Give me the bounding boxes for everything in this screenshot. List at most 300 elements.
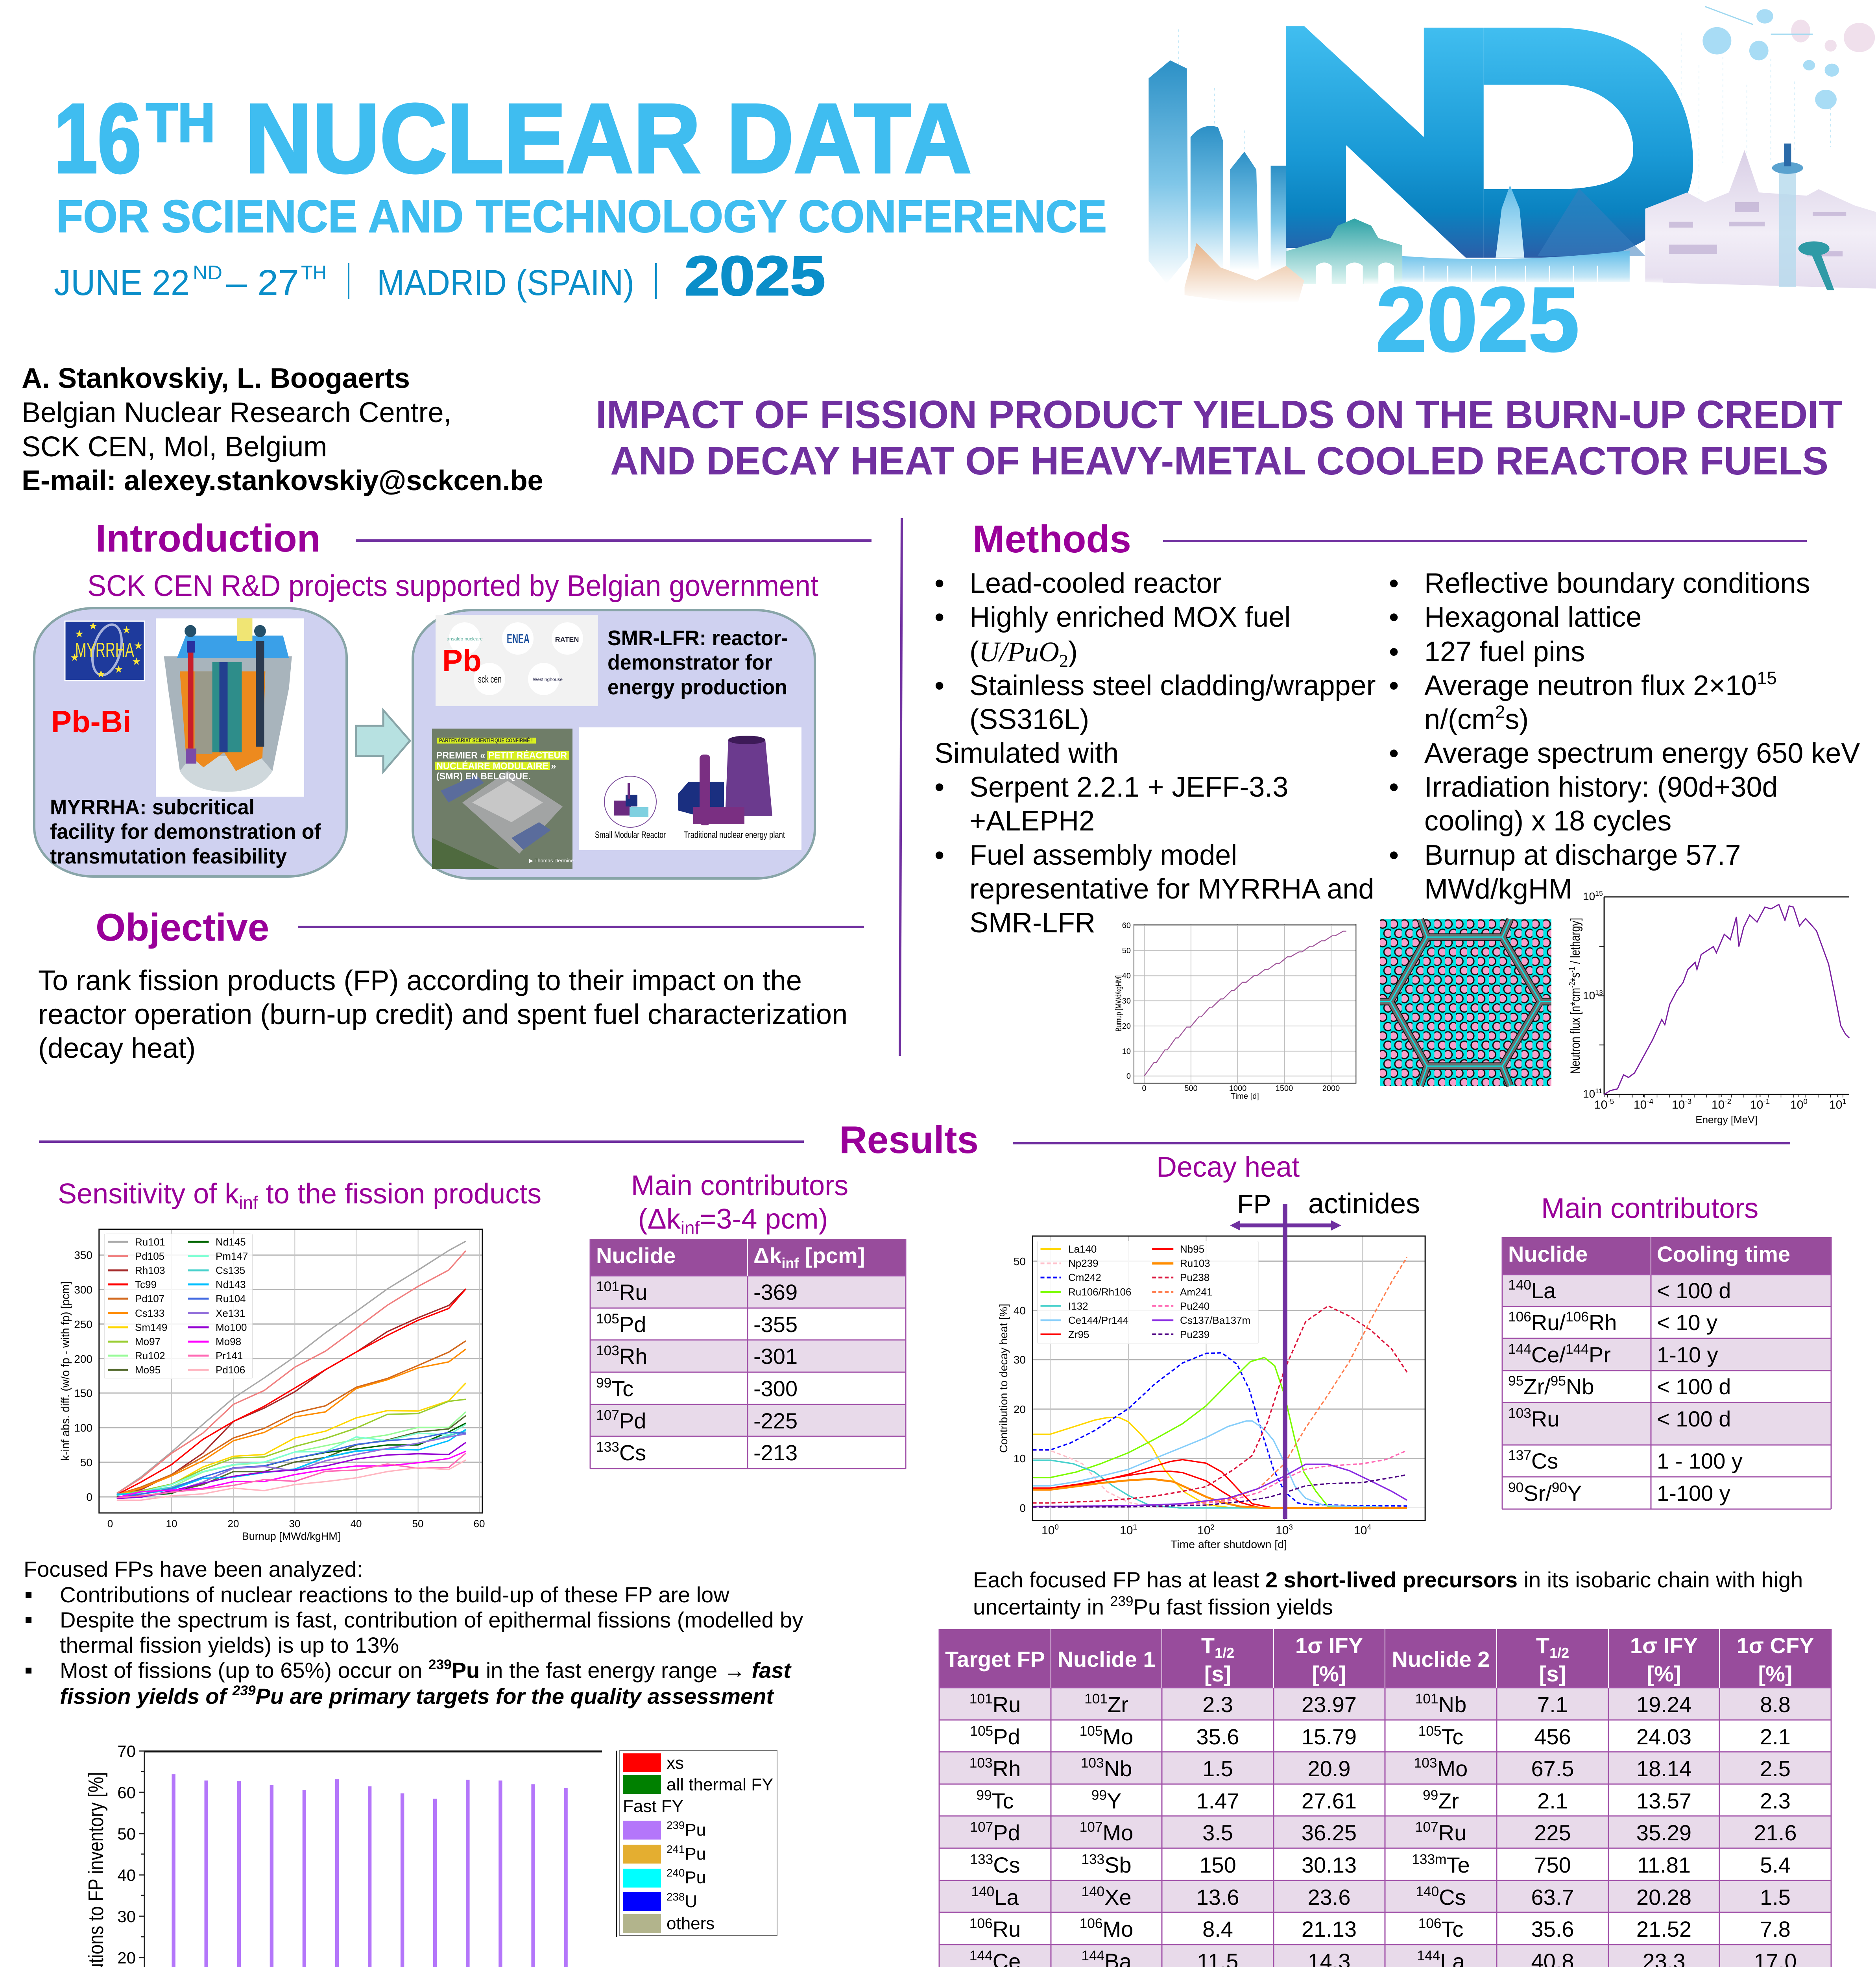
MYRRHA caption: transmutation feasibility [50,845,287,868]
methods list: left column: Serpent 2.2.1 + JEFF-3.3 [969,771,1288,803]
icon: MYRRHA logo: ★ [134,640,143,651]
table: main contributors to k-inf: 107Pd [596,1408,646,1433]
annotation: FP vs actinides [1230,1188,1420,1231]
table: precursors and uncertainties: 1.5 [1202,1756,1233,1781]
methods list: left column: Lead-cooled reactor [969,568,1221,599]
methods list: left column: Stainless steel cladding/wrapper [969,670,1376,701]
table: precursors and uncertainties: 24.03 [1636,1724,1691,1749]
table: precursors and uncertainties: 106Ru [969,1916,1021,1941]
text: precursors note [973,1567,1803,1619]
image: SMR versus traditional plant: Small Modular Reactor [595,830,666,840]
chart: burnup vs time: 20 [1122,1022,1131,1031]
table: precursors and uncertainties: 63.7 [1531,1885,1574,1910]
text: focused FPs analysis [24,1557,803,1709]
table: main contributors to k-inf: [pcm] [799,1243,865,1268]
table: precursors and uncertainties: 99Y [1091,1788,1121,1813]
SMR-LFR caption: SMR-LFR: reactor- [607,626,788,650]
methods list: right column: cooling) x 18 cycles [1424,805,1671,837]
methods list: left column: SMR-LFR [969,907,1095,939]
conference title [54,83,1107,242]
objective text: (decay heat) [38,1033,196,1064]
conference title: NUCLEAR DATA [245,83,971,193]
chart: sensitivity of k-inf: Mo97 [135,1336,161,1347]
heading: Introduction: Introduction [96,517,321,560]
table: precursors and uncertainties: 1.47 [1196,1788,1239,1813]
image: SMR site poster: PARTENARIAT SCIENTIFIQUE CONFIRMÉ ! [439,737,533,744]
chart: decay heat contributions: Pu239 [1180,1329,1209,1340]
table: precursors and uncertainties: 23.97 [1302,1692,1357,1717]
table: precursors and uncertainties: 20.28 [1636,1885,1691,1910]
chart: decay heat contributions: Zr95 [1068,1329,1089,1340]
table: precursors and uncertainties: 2.3 [1202,1692,1233,1717]
table: precursors and uncertainties: Nuclide 2 [1392,1647,1490,1672]
chart: decay heat contributions: Ce144/Pr144 [1068,1314,1128,1326]
methods list: left column: representative for MYRRHA and [969,873,1374,905]
table: precursors and uncertainties: 106Tc [1418,1916,1463,1941]
chart: burnup vs time: 0 [1142,1084,1147,1093]
chart: decay heat contributions: Time after shutdown [d] [1171,1538,1287,1550]
annotation: FP vs actinides: FP [1237,1189,1271,1219]
table: precursors and uncertainties: [s] [1539,1661,1566,1686]
chart: sensitivity of k-inf: Sm149 [135,1321,167,1333]
heading: Methods: Methods [973,517,1131,561]
MYRRHA caption [50,795,321,868]
MYRRHA caption: MYRRHA: subcritical [50,795,255,819]
methods list: left column: • [934,771,944,803]
chart: sensitivity of k-inf: Ru101 [135,1236,165,1248]
conference title: 16 [54,83,141,193]
chart: decay heat contributions: 102 [1197,1523,1215,1537]
chart: neutron flux spectrum: 1013 [1583,989,1603,1002]
partner logos: ansaldo nucleare [447,636,483,642]
partner logos: ENEA [507,631,530,646]
icon: MYRRHA logo: ★ [114,663,123,675]
conference dates and place: JUNE 22 [54,263,190,303]
chart: neutron flux spectrum: 10-2 [1712,1098,1731,1111]
chart: decay heat contributions: Ru106/Rh106 [1068,1286,1131,1298]
chart: sensitivity of k-inf: 50 [80,1456,92,1469]
table: precursors and uncertainties: 35.6 [1196,1724,1239,1749]
methods list: right column: Average neutron flux 2×1015 [1424,668,1777,701]
methods list: left column: • [934,840,944,871]
chart: neutron flux spectrum: Neutron flux [n*cm-2*s-1 / lethargy] [1567,918,1583,1074]
table: precursors and uncertainties: 99Zr [1423,1788,1459,1813]
chart: decay heat contributions: 104 [1354,1523,1371,1537]
methods list: right column: Hexagonal lattice [1424,602,1642,633]
chart: sensitivity of k-inf: Cs133 [135,1307,164,1319]
table: main contributors to decay heat: 1-10 y [1657,1342,1718,1367]
legend: fission contributions: 241Pu [667,1843,706,1864]
chart: sensitivity of k-inf: 150 [74,1387,92,1399]
image: SMR site poster: ▶ Thomas Dermine [529,858,574,864]
authors and affiliation: Belgian Nuclear Research Centre, [22,397,452,428]
table: precursors and uncertainties: 225 [1534,1820,1571,1845]
text: focused FPs analysis: Focused FPs have been analyzed: [24,1557,363,1581]
chart: decay heat contributions: Np239 [1068,1257,1099,1269]
table: main contributors to decay heat: < 100 d [1657,1406,1731,1431]
chart: burnup vs time: 10 [1122,1047,1131,1056]
text: focused FPs analysis: thermal fission yields) is up to 13% [60,1633,399,1657]
bar chart: contributions to FP inventory: 70 [117,1742,136,1760]
image: hexagonal fuel assembly [1380,919,1551,1086]
table: precursors and uncertainties: 101Nb [1415,1691,1466,1717]
table: precursors and uncertainties [939,1629,1831,1967]
methods list: right column: Irradiation history: (90d+30d [1424,771,1778,803]
image: MYRRHA reactor cut-away [156,618,304,797]
chart: sensitivity of k-inf: 10 [166,1518,177,1530]
table: precursors and uncertainties: 21.52 [1636,1917,1691,1941]
subheading: R&D projects: SCK CEN R&D projects supported by Belgian government [87,569,818,603]
chart: neutron flux spectrum: 10-4 [1634,1098,1653,1111]
chart: sensitivity of k-inf: 300 [74,1284,92,1296]
table: main contributors to decay heat: 137Cs [1508,1448,1558,1473]
image: SMR site poster: PETIT RÉACTEUR [488,750,567,761]
chart: burnup vs time: 0 [1126,1072,1131,1081]
table: main contributors to decay heat: 140La [1508,1277,1556,1303]
table: precursors and uncertainties: 1σ IFY [1295,1633,1363,1658]
bar chart: contributions to FP inventory: 40 [117,1866,136,1884]
table: main contributors to decay heat: < 10 y [1657,1310,1717,1335]
table: precursors and uncertainties: 133Sb [1081,1852,1132,1877]
bar chart: contributions to FP inventory: 50 [117,1825,136,1843]
table: precursors and uncertainties: 140La [971,1884,1019,1910]
poster title [596,393,1843,483]
chart: sensitivity of k-inf: k-inf abs. diff. (w/o fp - with fp) [pcm] [59,1281,72,1461]
bar chart: contributions to FP inventory [82,1742,777,1967]
table: precursors and uncertainties: 18.14 [1636,1756,1691,1781]
chart: burnup vs time [1114,921,1356,1101]
heading: Objective: Objective [96,906,269,949]
legend: fission contributions: 239Pu [667,1819,706,1840]
annotation: FP vs actinides: actinides [1308,1188,1420,1220]
chart: sensitivity of k-inf: Pd105 [135,1250,164,1262]
table: precursors and uncertainties: 107Mo [1080,1819,1133,1845]
legend: fission contributions [617,1751,777,1937]
table: precursors and uncertainties: 1σ IFY [1630,1633,1698,1658]
table: precursors and uncertainties: 101Zr [1084,1691,1128,1717]
table: precursors and uncertainties: 21.13 [1302,1917,1357,1941]
chart: sensitivity of k-inf: Mo100 [216,1321,247,1333]
table: main contributors to k-inf: 101Ru [596,1279,647,1305]
table: precursors and uncertainties: Nuclide 1 [1058,1647,1155,1672]
chart: decay heat contributions: 101 [1120,1523,1137,1537]
methods list: left column: +ALEPH2 [969,805,1095,837]
icon: MYRRHA logo: ★ [122,624,131,636]
chart: decay heat contributions: Contribution to decay heat [%] [997,1304,1010,1453]
table heading: main contributors k-inf: inf [681,1218,700,1238]
table: precursors and uncertainties: 103Mo [1414,1755,1468,1781]
methods list: left column: Simulated with [934,738,1119,769]
chart: sensitivity of k-inf: 30 [289,1518,300,1530]
legend: fission contributions: Fast FY [623,1797,683,1816]
table: precursors and uncertainties: Target FP [945,1647,1045,1672]
table: precursors and uncertainties: 107Pd [970,1819,1020,1845]
chart: decay heat contributions: Nb95 [1180,1243,1204,1255]
chart: decay heat contributions: 0 [1019,1502,1026,1514]
chart: decay heat contributions: Pu240 [1180,1300,1209,1312]
table: precursors and uncertainties: 8.4 [1202,1917,1233,1941]
chart: neutron flux spectrum: 100 [1790,1098,1808,1111]
chart: decay heat contributions: Cm242 [1068,1271,1101,1283]
table: main contributors to decay heat: Nuclide [1508,1242,1588,1266]
table: precursors and uncertainties: 140Xe [1081,1884,1132,1910]
methods list: right column: Average spectrum energy 650 keV [1424,738,1860,769]
icon: MYRRHA logo: ★ [75,628,84,640]
chart: decay heat contributions: La140 [1068,1243,1097,1255]
methods list: right column: 127 fuel pins [1424,636,1585,668]
image: SMR site poster [432,729,574,869]
icon: MYRRHA logo: ★ [89,620,98,632]
table: precursors and uncertainties: 23.6 [1308,1885,1350,1910]
chart: sensitivity of k-inf: 200 [74,1353,92,1365]
chart: sensitivity of k-inf: 0 [107,1518,113,1530]
table: precursors and uncertainties: 106Mo [1080,1916,1133,1941]
heading: Results: Results [839,1118,979,1161]
chart: burnup vs time: 500 [1184,1084,1198,1093]
chart: sensitivity of k-inf: 0 [86,1491,92,1503]
chart: sensitivity of k-inf: 350 [74,1249,92,1261]
poster title: IMPACT OF FISSION PRODUCT YIELDS ON THE BURN-UP CREDIT [596,393,1843,437]
table heading: main contributors k-inf: =3-4 pcm) [700,1203,828,1235]
partner logos: Westinghouse [533,677,563,682]
chart: neutron flux spectrum [1567,889,1849,1126]
chart: burnup vs time: 1000 [1229,1084,1246,1093]
bar chart: contributions to FP inventory: 20 [117,1949,136,1967]
objective text [38,965,848,1064]
chart heading: sensitivity: to the fission products [258,1178,541,1210]
table: main contributors to k-inf: -301 [753,1344,798,1369]
SMR-LFR caption: demonstrator for [607,651,772,674]
table: main contributors to k-inf: -225 [753,1408,798,1433]
conference dates and place: ND [193,262,222,284]
table: precursors and uncertainties: 36.25 [1302,1820,1357,1845]
methods list: left column: • [934,670,944,701]
methods list: right column: • [1389,670,1399,701]
chart: sensitivity of k-inf: Ru104 [216,1293,246,1305]
table: precursors and uncertainties: 7.8 [1760,1917,1791,1941]
table: precursors and uncertainties: 101Ru [969,1691,1021,1717]
table heading: main contributors k-inf [631,1170,848,1238]
table heading: main contributors k-inf: Main contributors [631,1170,848,1201]
chart: sensitivity of k-inf: Pd106 [216,1364,245,1376]
chart: neutron flux spectrum: 1015 [1583,889,1603,902]
table: main contributors to k-inf: 105Pd [596,1311,646,1337]
methods list: right column: Reflective boundary conditions [1424,568,1810,599]
table: main contributors to decay heat: 90Sr/90Y [1508,1480,1582,1506]
chart: burnup vs time: 2000 [1322,1084,1340,1093]
methods list: left column [934,568,1376,939]
objective text: reactor operation (burn-up credit) and spent fuel characterization [38,999,848,1030]
image: SMR site poster: » [551,761,556,771]
chart: sensitivity of k-inf: Rh103 [135,1264,165,1276]
table: precursors and uncertainties: 15.79 [1302,1724,1357,1749]
table: precursors and uncertainties: 99Tc [976,1788,1014,1813]
icon: MYRRHA logo: ★ [70,651,79,663]
chart: burnup vs time: Time [d] [1231,1092,1259,1101]
table: precursors and uncertainties: [%] [1758,1661,1793,1686]
table: precursors and uncertainties: 1σ CFY [1736,1633,1814,1658]
chart: decay heat contributions [997,1236,1425,1550]
heading: Objective [96,906,864,949]
authors and affiliation: E-mail: alexey.stankovskiy@sckcen.be [22,465,543,496]
methods list: left column: 2 [1059,651,1068,671]
chart: decay heat contributions: Ru103 [1180,1257,1210,1269]
chart: sensitivity of k-inf: Tc99 [135,1279,157,1290]
table: precursors and uncertainties: 67.5 [1531,1756,1574,1781]
legend: fission contributions: 238U [667,1891,697,1911]
image: SMR site poster: PREMIER « [436,750,485,761]
table: main contributors to k-inf [590,1239,906,1469]
chart: sensitivity of k-inf: 20 [228,1518,239,1530]
table: main contributors to k-inf: -369 [753,1280,798,1305]
table: precursors and uncertainties: 2.5 [1760,1756,1791,1781]
table: precursors and uncertainties: 133Cs [970,1852,1020,1877]
table: main contributors to k-inf: 103Rh [596,1343,647,1369]
icon: MYRRHA logo: ★ [132,655,141,667]
chart: sensitivity of k-inf: Nd143 [216,1279,246,1290]
table: main contributors to k-inf: -355 [753,1312,798,1337]
authors and affiliation: SCK CEN, Mol, Belgium [22,431,327,463]
SMR-LFR caption [607,626,788,699]
chart: decay heat contributions: 100 [1041,1523,1059,1537]
chart: sensitivity of k-inf: Pd107 [135,1293,164,1305]
table: precursors and uncertainties: [%] [1312,1661,1346,1686]
partner logos [436,615,598,706]
chart: sensitivity of k-inf: Xe131 [216,1307,245,1319]
chart: neutron flux spectrum: 10-1 [1750,1098,1770,1111]
table: main contributors to k-inf: Nuclide [596,1243,676,1268]
chart: sensitivity of k-inf: 40 [351,1518,362,1530]
partner logos: RATEN [555,636,579,644]
image: SMR versus traditional plant [579,727,801,850]
table: precursors and uncertainties: T [1201,1633,1215,1658]
heading: Introduction [96,517,872,560]
text: focused FPs analysis: Despite the spectrum is fast, contribution of epithermal fissions (modelled by [60,1607,803,1632]
partner logos: Pb [442,643,482,678]
table: precursors and uncertainties: 103Nb [1081,1755,1132,1781]
poster title: AND DECAY HEAT OF HEAVY-METAL COOLED REACTOR FUELS [610,439,1828,483]
table: precursors and uncertainties: 35.6 [1531,1917,1574,1941]
methods list: right column: n/(cm2s) [1424,702,1529,735]
chart: decay heat contributions: 50 [1014,1255,1026,1268]
chart heading: sensitivity: inf [239,1192,258,1213]
table: precursors and uncertainties: 1.5 [1760,1885,1791,1910]
table: precursors and uncertainties: [%] [1647,1661,1681,1686]
chart: burnup vs time: 50 [1122,947,1131,955]
chart heading: decay heat: Decay heat [1156,1151,1300,1183]
chart: decay heat contributions: I132 [1068,1300,1088,1312]
methods list: left column: Highly enriched MOX fuel [969,602,1291,633]
table: main contributors to k-inf: -213 [753,1440,798,1465]
table: precursors and uncertainties: 105Mo [1080,1723,1133,1749]
chart: sensitivity of k-inf: 250 [74,1318,92,1330]
bar chart: contributions to FP inventory: 60 [117,1783,136,1802]
table: precursors and uncertainties: 19.24 [1636,1692,1691,1717]
legend: fission contributions: all thermal FY [667,1775,773,1794]
objective text: To rank fission products (FP) according to their impact on the [38,965,802,996]
panel: SMR-LFR [413,610,815,878]
chart: decay heat contributions: 40 [1014,1305,1026,1317]
chart: neutron flux spectrum: 1011 [1583,1087,1602,1100]
conference dates and place [54,245,825,307]
chart: sensitivity of k-inf: Mo95 [135,1364,161,1376]
table: precursors and uncertainties: 5.4 [1760,1853,1791,1877]
chart: sensitivity of k-inf: Pr141 [216,1350,243,1362]
chart: sensitivity of k-inf: Cs135 [216,1264,245,1276]
table: precursors and uncertainties: 105Pd [970,1723,1020,1749]
methods list: left column: Fuel assembly model [969,840,1237,871]
table: precursors and uncertainties: 2.1 [1760,1724,1791,1749]
chart: decay heat contributions: 20 [1014,1403,1026,1415]
MYRRHA caption: facility for demonstration of [50,820,321,843]
conference title: FOR SCIENCE AND TECHNOLOGY CONFERENCE [56,191,1107,242]
methods list: right column: • [1389,771,1399,803]
methods list: right column: • [1389,602,1399,633]
table: precursors and uncertainties: 103Rh [969,1755,1021,1781]
ND 2025 logo artwork [1148,7,1876,371]
legend: fission contributions: xs [667,1753,684,1773]
methods list: left column: (SS316L) [969,704,1089,735]
methods list: right column: MWd/kgHM [1424,873,1572,905]
methods list: right column: Burnup at discharge 57.7 [1424,840,1741,871]
text: precursors note: Each focused FP has at least 2 short-lived precursors in its isobaric chain with high [973,1567,1803,1592]
table: main contributors to decay heat: 144Ce/144Pr [1508,1341,1611,1367]
chart: neutron flux spectrum: 10-3 [1672,1098,1691,1111]
table: precursors and uncertainties: 20.9 [1308,1756,1350,1781]
methods list: left column: ) [1068,636,1078,668]
chart: sensitivity of k-inf [59,1229,485,1542]
table: main contributors to decay heat: 106Ru/106Rh [1508,1309,1617,1335]
table: main contributors to decay heat: < 100 d [1657,1374,1731,1399]
methods list: right column: • [1389,738,1399,769]
icon: MYRRHA logo: ★ [96,668,105,680]
image: SMR site poster: (SMR) EN BELGIQUE. [436,771,531,782]
table: main contributors to k-inf: Δk [753,1243,781,1268]
table: main contributors to decay heat: < 100 d [1657,1278,1731,1303]
methods list: left column: (U/PuO [969,636,1059,668]
table: precursors and uncertainties: T [1536,1633,1549,1658]
table: precursors and uncertainties: 150 [1199,1853,1236,1877]
chart: neutron flux spectrum: 10-5 [1594,1098,1614,1111]
icon: MYRRHA logo [65,620,144,681]
table: main contributors to decay heat: 103Ru [1508,1406,1559,1431]
chart: burnup vs time: 40 [1122,972,1131,980]
authors and affiliation [22,363,543,496]
conference dates and place: – 27 [226,263,299,303]
ND 2025 logo artwork: 2025 [1376,269,1579,371]
table: precursors and uncertainties: [s] [1204,1661,1231,1686]
chart heading: sensitivity: Sensitivity of k [58,1178,239,1210]
table: precursors and uncertainties: 1/2 [1215,1645,1234,1661]
table: precursors and uncertainties: 7.1 [1537,1692,1568,1717]
chart: sensitivity of k-inf: 50 [412,1518,423,1530]
chart: sensitivity of k-inf: 100 [74,1422,92,1434]
table: main contributors to k-inf: inf [781,1255,799,1271]
table: precursors and uncertainties: 11.81 [1637,1853,1691,1877]
text: precursors note: uncertainty in 239Pu fast fission yields [973,1594,1333,1619]
chart: decay heat contributions: 30 [1014,1354,1026,1366]
label: Pb-Bi coolant: Pb-Bi [51,704,131,739]
table: precursors and uncertainties: 27.61 [1302,1788,1357,1813]
chart: neutron flux spectrum: 101 [1829,1098,1846,1111]
table: main contributors to decay heat: Cooling time [1657,1242,1790,1266]
arrow: MYRRHA to SMR-LFR [356,710,410,772]
image: SMR versus traditional plant: Traditional nuclear energy plant [684,830,785,840]
table: main contributors to decay heat: 95Zr/95Nb [1508,1373,1594,1399]
authors and affiliation: A. Stankovskiy, L. Boogaerts [22,363,410,394]
table heading: main contributors k-inf: (Δk [638,1203,681,1235]
table: main contributors to k-inf: 99Tc [596,1375,633,1401]
